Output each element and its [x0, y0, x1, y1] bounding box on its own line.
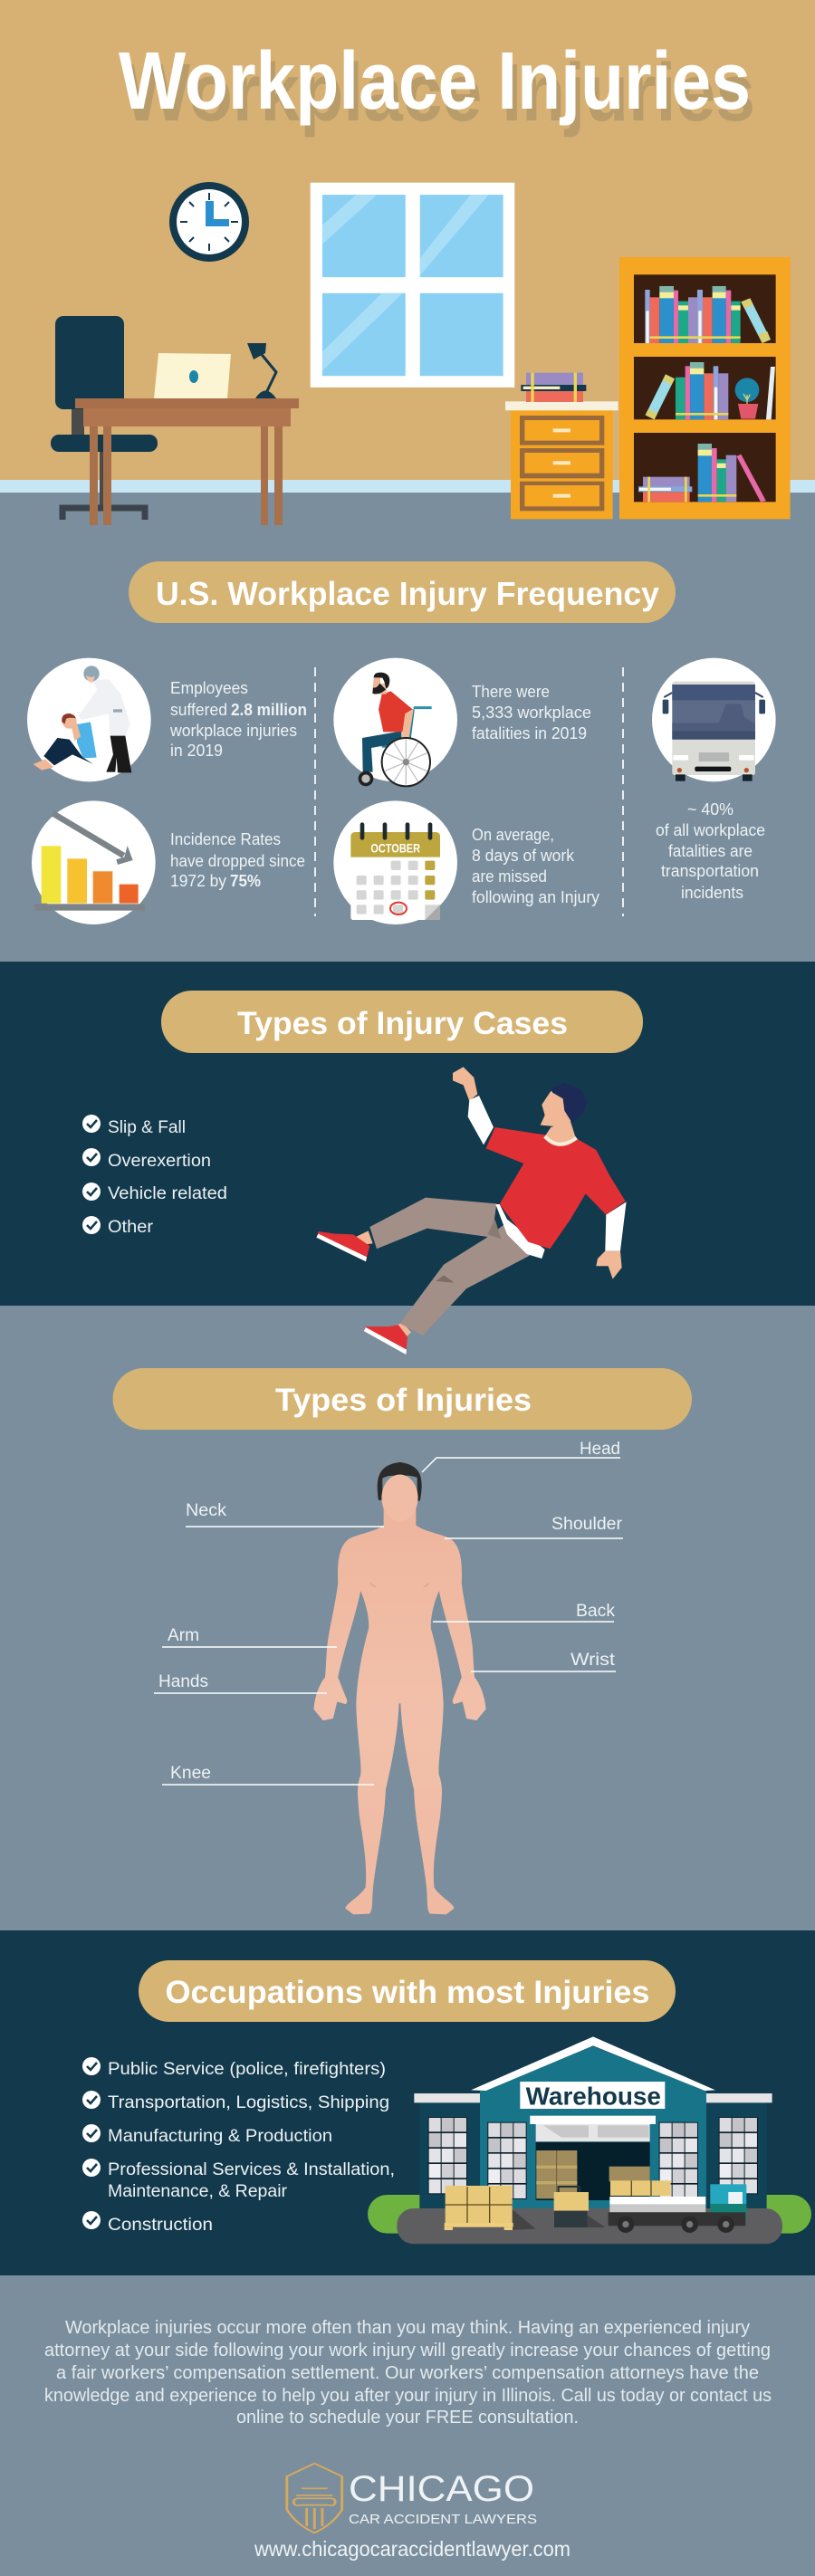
- text: 5,333 fatalities: 5,333 workplace: [472, 704, 591, 722]
- text: 40 percent transportation: ~ 40%: [687, 800, 734, 819]
- icon: window: [311, 183, 514, 388]
- logo text: CHICAGO: [349, 2469, 534, 2509]
- list: occupations: Transportation, Logistics, Shipping: [108, 2093, 389, 2112]
- body part labels: Hands: [158, 1672, 208, 1691]
- list: occupations: Maintenance, & Repair: [108, 2182, 288, 2201]
- heading: U.S. workplace injury frequency: [129, 561, 676, 623]
- text: 40 percent transportation: incidents: [681, 884, 743, 902]
- text: 2.8 million injuries: workplace injuries: [169, 722, 297, 740]
- body part labels: Wrist: [570, 1651, 616, 1670]
- list: occupations: [82, 2057, 395, 2235]
- text: closing paragraph: online to schedule your FREE consultation.: [236, 2408, 579, 2428]
- text: 40 percent transportation: transportation: [661, 862, 759, 880]
- list: injury cases: Vehicle related: [108, 1184, 227, 1203]
- panel: footer background: [0, 2275, 815, 2576]
- wall background: [0, 0, 815, 481]
- text: 8 days missed: following an Injury: [472, 888, 599, 906]
- heading: U.S. workplace injury frequency: U.S. Workplace Injury Frequency: [156, 575, 659, 612]
- text: 8 days missed: On average,: [472, 826, 554, 844]
- text: 2.8 million injuries: Employees: [170, 679, 248, 697]
- text: 8 days missed: 8 days of work: [472, 847, 575, 865]
- illustration: warehouse: Warehouse: [526, 2082, 661, 2110]
- illustration: falling man: [316, 1067, 627, 1355]
- heading: types of injuries: [112, 1368, 692, 1430]
- body part labels: Head: [580, 1440, 620, 1459]
- panel: types of injuries background: [0, 1306, 815, 1930]
- text: incidence rates: 1972 by: [170, 872, 226, 890]
- heading: types of injuries: Types of Injuries: [275, 1383, 532, 1418]
- text: 8 days missed: [472, 826, 599, 906]
- icon: desk lamp: [247, 343, 276, 398]
- icon: doctor helping injured employee: [27, 658, 151, 781]
- body part labels: Neck: [186, 1501, 227, 1520]
- text: incidence rates: 75%: [230, 872, 261, 890]
- text: 5,333 fatalities: [472, 683, 591, 742]
- divider right: [622, 667, 624, 916]
- list: occupations: Manufacturing & Production: [108, 2127, 332, 2146]
- floor and frequency section background: [0, 493, 815, 962]
- text: 2.8 million injuries: in 2019: [170, 742, 223, 760]
- list: occupations: Public Service (police, firefighters): [108, 2060, 386, 2079]
- heading: types of injury cases: Types of Injury Cases: [237, 1006, 568, 1041]
- text: incidence rates: Incidence Rates: [170, 830, 281, 848]
- panel: types of injury cases background: [0, 962, 815, 1306]
- text: closing paragraph: a fair workers’ compensation settlement. Our workers’ compensation attorneys have the: [56, 2363, 759, 2383]
- callout lines: [154, 1458, 623, 1785]
- text: 8 days missed: are missed: [472, 867, 547, 886]
- text: closing paragraph: Workplace injuries occur more often than you may think. Having an experienced injury: [65, 2318, 750, 2338]
- text: closing paragraph: [44, 2318, 772, 2428]
- text: 2.8 million injuries: [169, 679, 307, 760]
- icon: logo shield: [287, 2464, 342, 2533]
- illustration: human body: [313, 1462, 486, 1914]
- text: 5,333 fatalities: There were: [472, 683, 550, 701]
- icon: october calendar: [333, 800, 457, 924]
- text: closing paragraph: attorney at your side following your work injury will greatly increase your chances of getting: [44, 2341, 771, 2361]
- heading: types of injury cases: [161, 991, 643, 1053]
- text: 40 percent transportation: of all workplace: [656, 821, 765, 839]
- icon: cabinet with books: [505, 373, 618, 519]
- icon: october calendar: OCTOBER: [370, 841, 420, 856]
- body part labels: Arm: [168, 1626, 199, 1645]
- list: injury cases: Slip & Fall: [108, 1118, 186, 1137]
- icon: laptop: [154, 353, 231, 398]
- heading: occupations with most injuries: Occupations with most Injuries: [165, 1975, 650, 2010]
- icon: office chair: [51, 316, 158, 520]
- icon: falling bar chart: [32, 800, 156, 924]
- body part labels: Back: [576, 1602, 615, 1621]
- icon: desk: [75, 398, 299, 525]
- list: injury cases: Other: [108, 1218, 154, 1237]
- website url: www.chicagocaraccidentlawyer.com: [254, 2537, 570, 2561]
- text: incidence rates: have dropped since: [170, 852, 305, 870]
- text: incidence rates: [170, 830, 305, 890]
- baseboard: [0, 480, 815, 493]
- text: 2.8 million injuries: suffered: [170, 701, 227, 719]
- body part labels: [158, 1440, 623, 1783]
- list: occupations: Professional Services & Installation,: [108, 2160, 395, 2179]
- icon: wall clock: [169, 182, 249, 262]
- body part labels: Knee: [170, 1764, 211, 1783]
- list: occupations: Construction: [108, 2216, 213, 2235]
- text: 40 percent transportation: fatalities are: [668, 842, 753, 860]
- text: 40 percent transportation: [656, 800, 765, 902]
- text: 2.8 million injuries: 2.8 million: [231, 701, 307, 719]
- icon: bus: [652, 658, 776, 781]
- logo text: CAR ACCIDENT LAWYERS: [349, 2512, 537, 2527]
- panel: occupations background: [0, 1930, 815, 2275]
- logo text: [349, 2469, 537, 2527]
- illustration: warehouse: [368, 2036, 811, 2244]
- text: 5,333 fatalities: fatalities in 2019: [472, 724, 587, 742]
- icon: bookshelf: [619, 257, 791, 519]
- text: closing paragraph: knowledge and experience to help you after your injury in Illinois. Call us today or contact us: [44, 2386, 772, 2406]
- body part labels: Shoulder: [551, 1515, 623, 1534]
- divider left: [314, 667, 316, 916]
- list: injury cases: [82, 1115, 227, 1237]
- heading: occupations with most injuries: [139, 1960, 676, 2022]
- list: injury cases: Overexertion: [108, 1152, 211, 1171]
- icon: man in wheelchair: [333, 658, 457, 786]
